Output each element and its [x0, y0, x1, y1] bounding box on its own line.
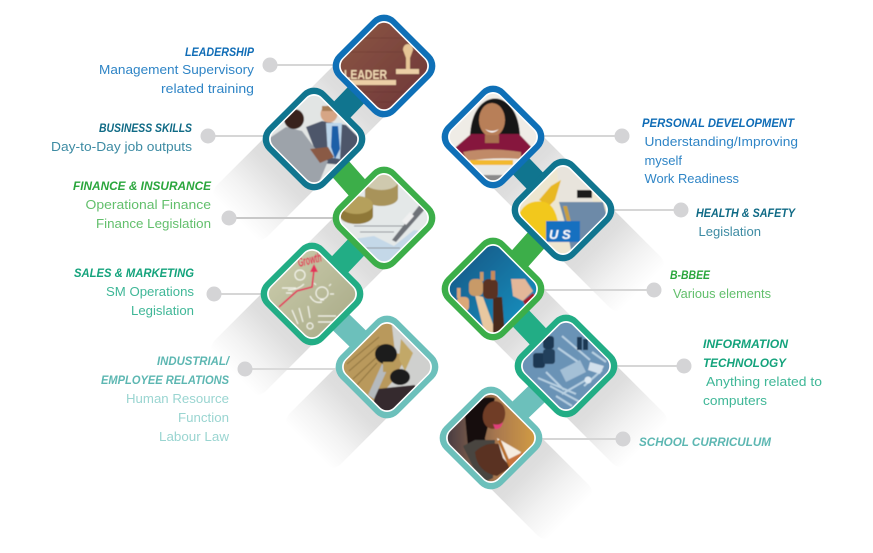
diamond photo: leader blocks: LEADER [344, 67, 387, 82]
text block: industrial relations details: Human Resource [126, 391, 229, 406]
diamond photo: thumbs up [442, 238, 544, 340]
connector bars between diamonds [312, 66, 566, 438]
long diagonal shadows [207, 41, 671, 543]
text block: information technology details: Anything related to [706, 374, 822, 389]
text block: personal development details: Work Readiness [644, 171, 739, 186]
heading: health and safety: HEALTH & SAFETY [696, 206, 796, 220]
diamond photo: student with backpack [440, 386, 542, 490]
text block: information technology details [703, 374, 822, 408]
heading: industrial employee relations [101, 354, 231, 387]
heading: sales and marketing: SALES & MARKETING [74, 266, 194, 280]
leader line and dot [541, 128, 630, 144]
diamond photo: gavel [336, 316, 438, 418]
diamond photo: hard hat and gloves: U S [549, 227, 571, 242]
panel: b-bbee [442, 238, 770, 340]
text block: personal development details: Understanding/Improving [644, 134, 798, 149]
text block: business skills details: Day-to-Day job outputs [51, 139, 193, 154]
text block: sales details [106, 284, 195, 318]
text block: sales details: SM Operations [106, 284, 195, 299]
panel: personal development [442, 86, 798, 188]
panel: health and safety [512, 158, 796, 262]
text block: finance details: Finance Legislation [96, 216, 211, 231]
text block: leadership details [99, 62, 255, 96]
text block: industrial relations details: Labour Law [159, 429, 230, 444]
heading: industrial employee relations: INDUSTRIAL/ [157, 354, 231, 368]
heading: business skills: BUSINESS SKILLS [99, 121, 192, 135]
text block: leadership details: related training [161, 81, 254, 96]
text block: sales details: Legislation [131, 303, 194, 318]
heading: school curriculum: SCHOOL CURRICULUM [639, 435, 772, 449]
text block: industrial relations details: Function [178, 410, 229, 425]
heading: b-bbee: B-BBEE [670, 268, 711, 282]
leader line and dot [200, 128, 268, 144]
leader line and dot [540, 282, 662, 298]
leader line and dot [610, 202, 688, 218]
diamond photo: smiling woman [442, 86, 544, 188]
heading: leadership: LEADERSHIP [185, 45, 254, 59]
panel: business skills [52, 88, 366, 190]
panel: leadership [100, 14, 436, 118]
text block: b-bbee details: Various elements [673, 286, 771, 301]
panel: school curriculum [440, 386, 772, 490]
text block: information technology details: computers [703, 393, 768, 408]
heading: industrial employee relations: EMPLOYEE RELATIONS [101, 373, 229, 387]
text block: finance details: Operational Finance [86, 197, 211, 212]
leader line and dot [538, 432, 630, 446]
heading: information technology [703, 337, 788, 370]
leader line and dot [612, 358, 692, 374]
heading: information technology: INFORMATION [703, 337, 788, 351]
diamond photo: growth chalk drawing [260, 242, 364, 346]
text block: personal development details [644, 134, 798, 186]
diamond photo: business people [262, 88, 366, 190]
heading: finance and insurance: FINANCE & INSURANCE [73, 179, 212, 193]
heading: information technology: TECHNOLOGY [703, 356, 787, 370]
diamond photo: coins and pen [332, 166, 436, 270]
diamond photo: circuit board [514, 314, 618, 418]
text block: leadership details: Management Supervisory [99, 62, 255, 77]
panel: sales and marketing [74, 242, 364, 346]
text block: health and safety details: Legislation [698, 224, 761, 239]
heading: personal development: PERSONAL DEVELOPMENT [642, 116, 796, 130]
text block: industrial relations details [126, 391, 230, 444]
leader line and dot [262, 58, 335, 72]
diamond photo: growth chalk drawing: Growth [296, 250, 323, 270]
text block: personal development details: myself [644, 153, 682, 168]
panel: finance and insurance [73, 166, 436, 270]
diamond photo: hard hat and gloves [512, 158, 614, 262]
panel: information technology [514, 314, 822, 418]
diamond photo: leader blocks [332, 14, 436, 118]
panel: industrial and employee relations [101, 309, 445, 444]
leader line and dot [206, 286, 265, 302]
leader line and dot [222, 210, 338, 226]
text block: finance details [86, 197, 211, 231]
leader line and dot [238, 362, 338, 376]
